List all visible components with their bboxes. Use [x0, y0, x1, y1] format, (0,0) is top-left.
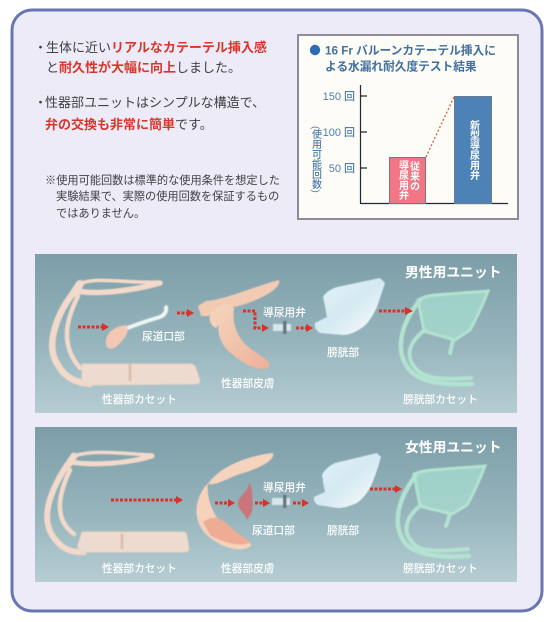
labels: female parts: 尿道口部	[252, 524, 295, 537]
text block: footnote: ではありません。	[56, 207, 145, 220]
part: genital cassette	[47, 452, 189, 552]
y axis ticks: 150 回	[323, 90, 355, 103]
labels: female parts: 膀胱部	[327, 524, 359, 537]
part: bladder cassette	[401, 291, 488, 384]
part: catheter valve	[273, 321, 291, 334]
bar: conventional valve: 従来の	[408, 160, 420, 191]
text block: feature bullets: 性器部ユニットはシンプルな構造で、	[45, 95, 265, 110]
chart title: よる水漏れ耐久度テスト結果	[325, 60, 477, 74]
y axis label: (使用可能回数)	[310, 126, 322, 193]
text block: footnote: 実験結果で、実際の使用回数を保証するもの	[56, 189, 279, 203]
labels: male parts: 膀胱部カセット	[403, 393, 478, 406]
panel: male unit	[35, 254, 517, 413]
connector: dotted growth line	[426, 97, 454, 157]
part: genital skin	[196, 453, 273, 549]
heading: male unit: 男性用ユニット	[405, 264, 502, 280]
part: urethral opening	[238, 482, 253, 520]
part: bladder cassette	[398, 466, 485, 557]
y axis ticks: 100 回	[323, 126, 355, 139]
panel: female unit	[35, 427, 517, 582]
chart title	[310, 44, 496, 74]
heading: female unit: 女性用ユニット	[405, 439, 502, 455]
text block: feature bullets	[34, 40, 267, 132]
labels: female parts	[102, 481, 478, 575]
text block: feature bullets: と耐久性が大幅に向上しました。	[46, 60, 241, 75]
labels: male parts: 導尿用弁	[263, 306, 306, 319]
part: genital skin	[198, 280, 279, 369]
part: catheter valve	[272, 495, 290, 508]
labels: male parts: 尿道口部	[142, 330, 185, 343]
bar: conventional valve	[390, 158, 426, 204]
part: genital cassette	[52, 280, 200, 385]
labels: male parts: 膀胱部	[327, 346, 359, 359]
labels: female parts: 膀胱部カセット	[403, 562, 478, 575]
labels: female parts: 導尿用弁	[263, 481, 306, 494]
labels: female parts: 性器部カセット	[102, 562, 177, 575]
text block: feature bullets: ・	[34, 40, 47, 55]
y axis ticks	[323, 85, 508, 204]
text block: footnote: ※使用可能回数は標準的な使用条件を想定した	[45, 173, 280, 187]
text block: feature bullets: 生体に近いリアルなカテーテル挿入感	[46, 40, 267, 55]
arrows: male assembly	[78, 307, 413, 332]
chart title: 16 Fr バルーンカテーテル挿入に	[325, 44, 496, 58]
part: bladder	[315, 278, 385, 335]
labels: female parts: 性器部皮膚	[221, 562, 275, 575]
arrows: female assembly	[111, 485, 402, 507]
text block: feature bullets: ・	[34, 95, 47, 110]
panel: durability chart	[298, 35, 518, 219]
y axis ticks: 50 回	[329, 162, 355, 175]
bar: new valve: 新型導尿用弁	[468, 119, 480, 181]
text block: feature bullets: 弁の交換も非常に簡単です。	[45, 117, 213, 132]
part: bladder	[314, 453, 381, 508]
bar: conventional valve: 導尿用弁	[396, 159, 408, 201]
bar: new valve	[454, 96, 492, 204]
labels: male parts: 性器部皮膚	[221, 377, 275, 390]
labels: male parts	[102, 306, 478, 406]
text block: footnote	[45, 173, 280, 220]
part: urethral opening	[106, 306, 166, 349]
labels: male parts: 性器部カセット	[102, 393, 177, 406]
